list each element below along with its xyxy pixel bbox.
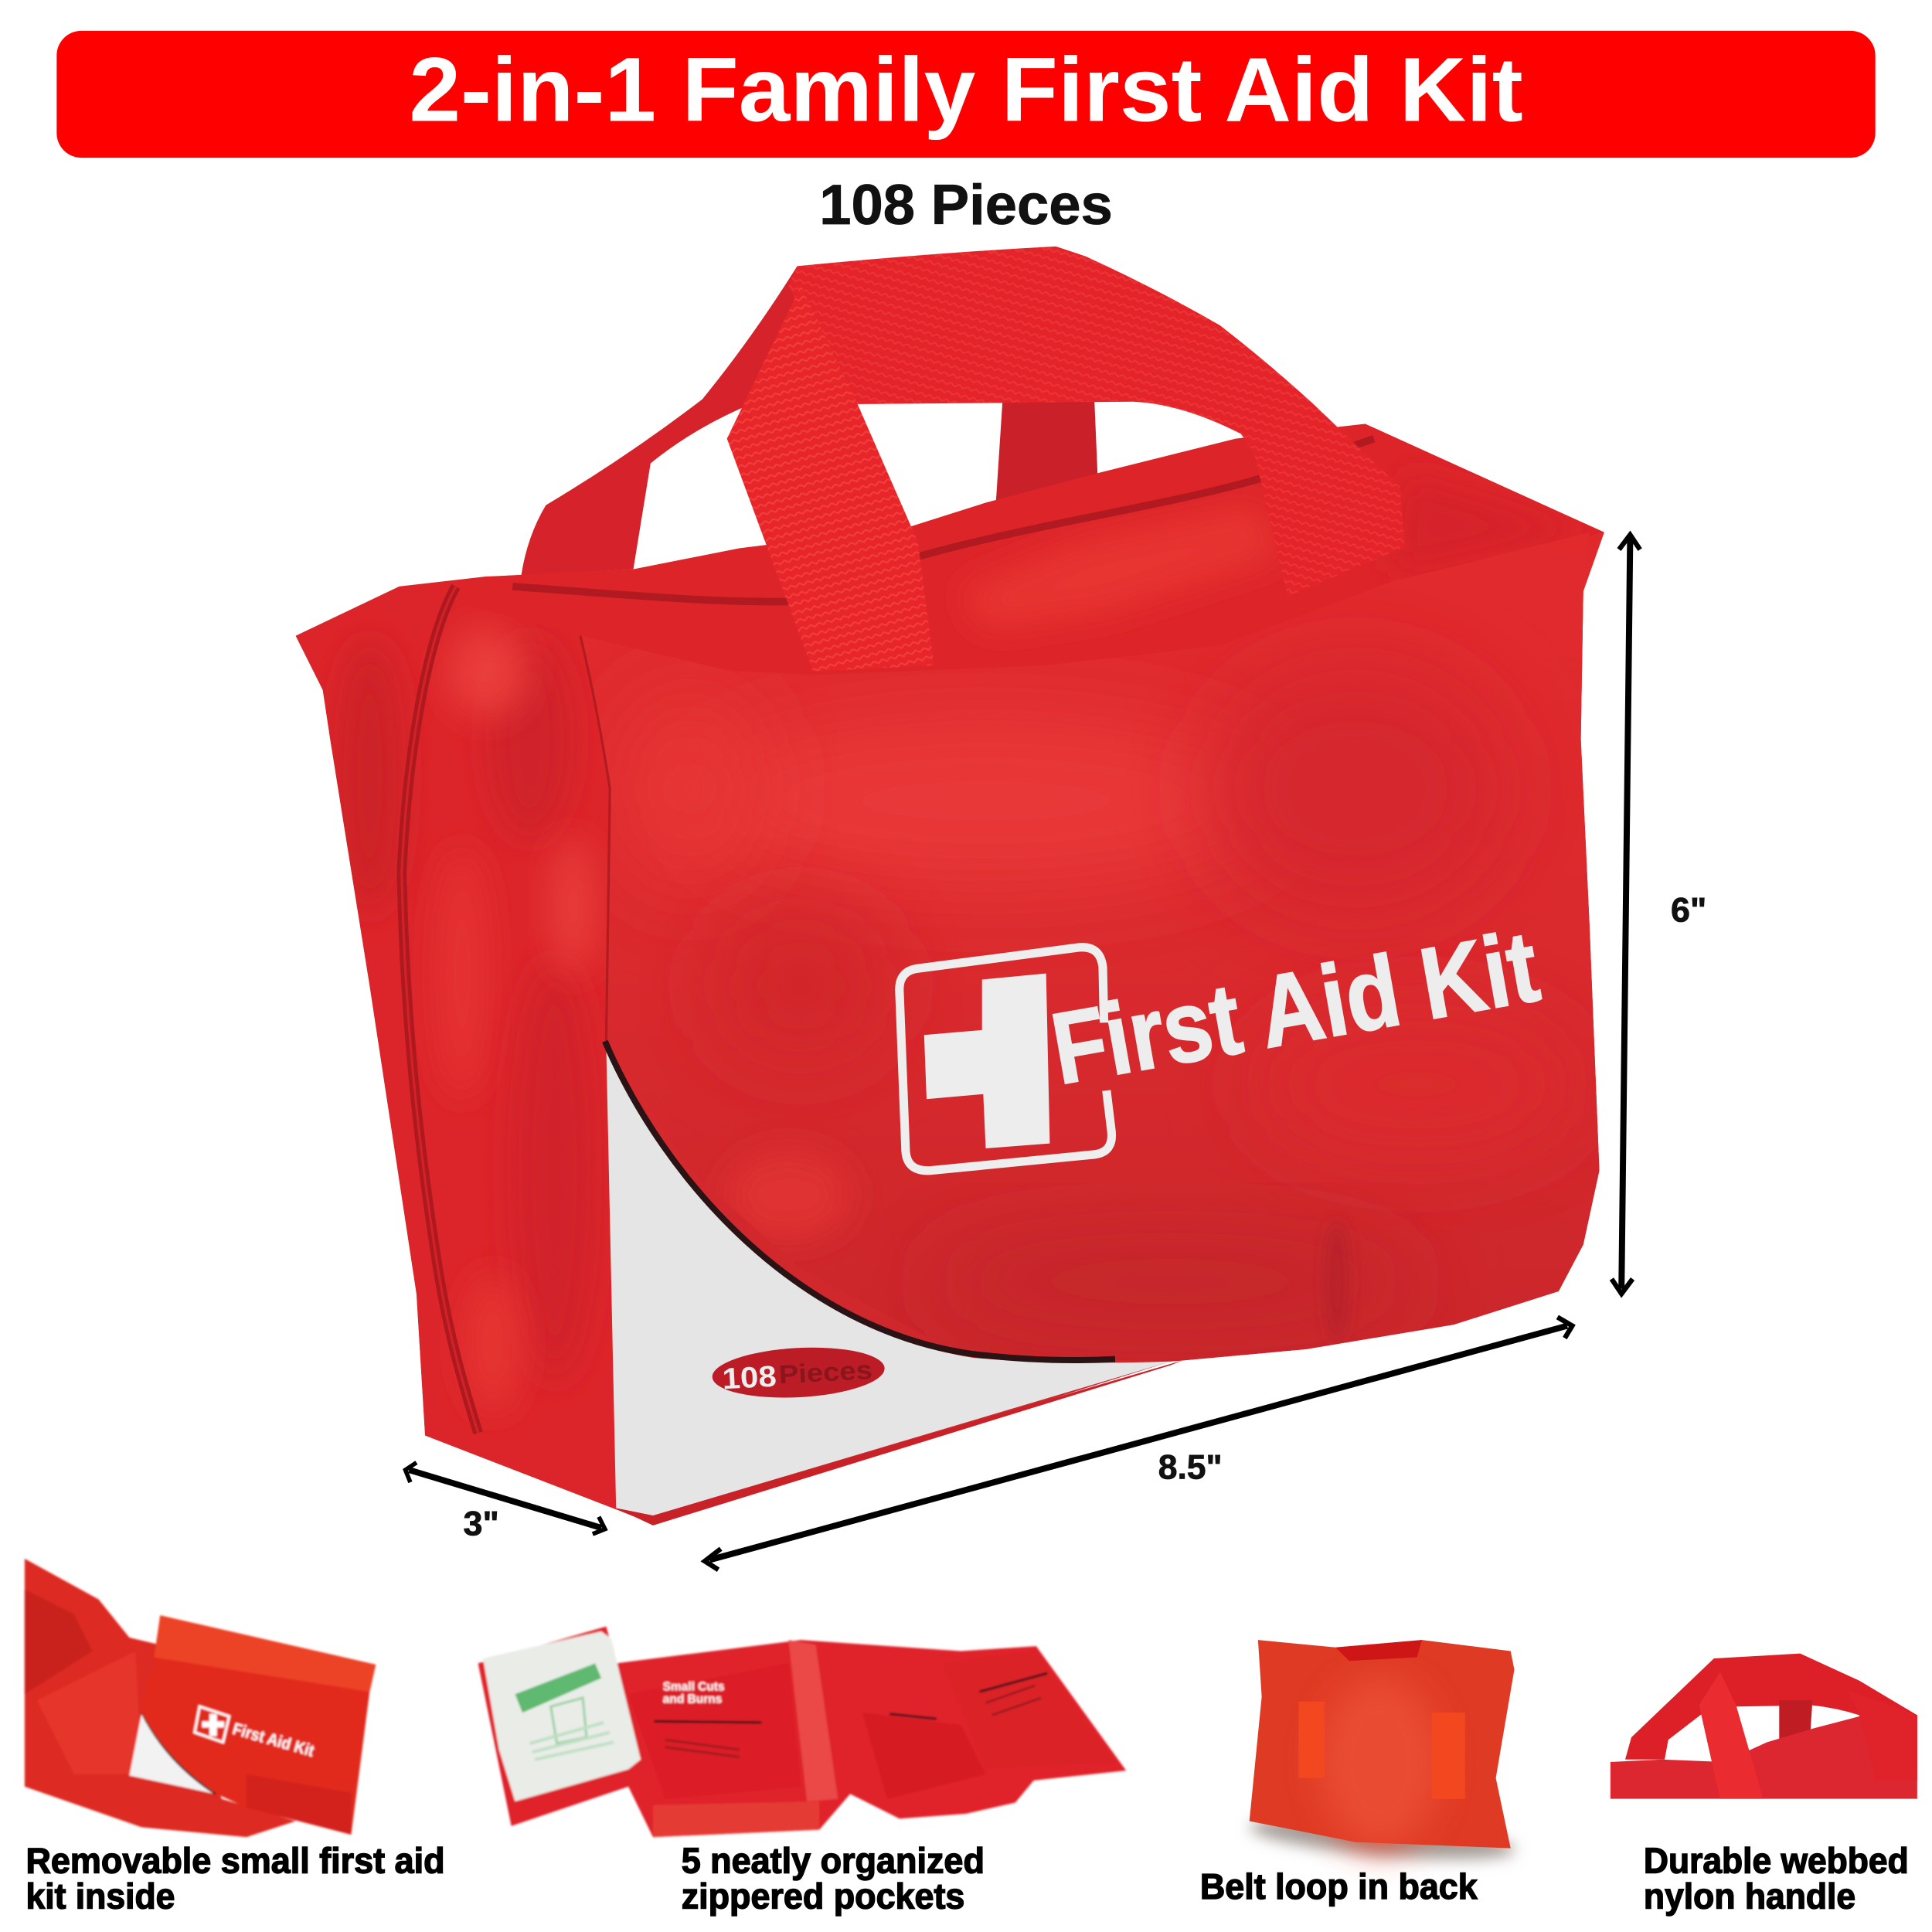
caption: removable kit: kit inside [26,1876,175,1917]
open organizer [478,1627,1126,1837]
back of bag [1250,1640,1515,1849]
handle arch [1625,1654,1917,1774]
front handle left strap [727,286,934,672]
first aid logo [900,947,1111,1171]
top panel with zipper [400,423,1604,615]
pocket print [655,1673,1047,1723]
bag side panel shading [296,423,1604,1513]
main product photo: first aid bag [296,247,1614,1526]
sterile packet [483,1631,641,1801]
caption: handle: Durable webbed [1644,1840,1909,1880]
thumbnail: open pockets: Small Cuts [663,1681,725,1694]
caption: handle [1644,1840,1909,1917]
thumbnail: belt loop back [1248,1640,1516,1867]
right strap [1859,1715,1917,1781]
caption: handle: nylon handle [1644,1876,1855,1917]
rear strap [1779,1700,1813,1739]
thumbnail: open pockets [478,1627,1126,1837]
bag logo wordmark: First Aid Kit [1044,910,1546,1106]
caption: belt loop: Belt loop in back [1200,1866,1478,1906]
rear center strap [995,394,1098,508]
bag rear handle strap [521,266,838,576]
dimension: depth: 3" [463,1505,499,1543]
small kit logo [195,1706,230,1742]
belt loop right [1432,1713,1465,1799]
piece count oval: 108 [722,1360,777,1396]
dimension: depth [406,1463,605,1543]
piece count oval [711,1343,886,1402]
thumbnail: open pockets: and Burns [663,1692,722,1706]
white insert [129,1713,216,1794]
caption: pockets [682,1840,985,1917]
subtitle: piece count: 108 Pieces [819,173,1113,236]
front strap [1699,1672,1764,1799]
caption: pockets: 5 neatly organized [682,1840,985,1880]
small kit pouch [141,1615,376,1835]
shadow [1248,1810,1516,1867]
outer bag [25,1559,296,1837]
thumbnail: removable small kit [25,1559,376,1837]
piece count oval: Pieces [778,1356,873,1389]
front seam [580,636,610,1041]
small kit wordmark: First Aid Kit [230,1719,316,1760]
title banner: 2-in-1 Family First Aid Kit [409,39,1523,141]
bag body top [1611,1715,1917,1799]
caption: pockets: zippered pockets [682,1876,964,1917]
bag body [296,423,1604,1524]
black piping [605,1041,1115,1360]
top zipper [512,439,1374,602]
caption: removable kit [26,1840,445,1917]
white corner panel [606,1047,1171,1515]
dimension: height: 6" [1671,892,1706,930]
caption: removable kit: Removable small first aid [26,1840,445,1880]
red bottom edge [616,1360,1183,1526]
title banner [56,31,1876,158]
dimension: height [1611,535,1706,1294]
bag front panel [566,518,1614,1380]
front handle band [788,247,1405,597]
dimension: width [705,1317,1572,1570]
dimension: width: 8.5" [1158,1448,1223,1486]
thumbnail: webbed handle [1611,1654,1917,1799]
belt loop left [1298,1702,1325,1778]
side zipper [402,587,478,1433]
